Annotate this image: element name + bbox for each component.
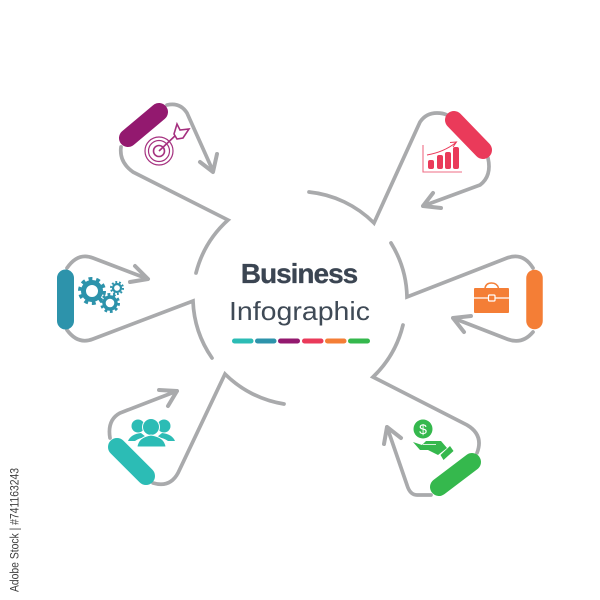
icon: hand holding dollar coin: $	[419, 421, 427, 437]
pill: blue	[57, 278, 74, 321]
connector line with arrow	[373, 325, 479, 495]
pill: orange	[526, 278, 543, 321]
title	[229, 258, 370, 326]
icon: gears	[80, 279, 123, 312]
connector line with arrow	[121, 104, 228, 273]
colour bar row	[232, 338, 370, 344]
icon: three people	[128, 418, 175, 447]
panel: chart (top right)	[309, 113, 489, 223]
connector line with arrow	[309, 113, 489, 223]
icon: target with arrow	[145, 124, 189, 165]
connector line with arrow	[109, 374, 284, 484]
heading: Infographic: Infographic	[229, 296, 370, 326]
icon: bar chart rising	[423, 142, 462, 172]
panel: money (bottom right)	[373, 325, 479, 495]
pill: red	[454, 120, 483, 150]
connector line with arrow	[391, 243, 533, 341]
pill: teal	[117, 447, 146, 476]
heading: Business: Business	[241, 258, 358, 289]
pill: purple	[128, 112, 159, 138]
pill: green	[439, 462, 472, 487]
connector line with arrow	[67, 256, 212, 358]
stock credit: Adobe Stock | #741163243	[10, 468, 22, 592]
panel: briefcase (right)	[391, 243, 534, 341]
icon: hand holding dollar coin	[413, 420, 454, 460]
panel: gears (left)	[66, 256, 212, 358]
icon: briefcase	[474, 283, 509, 313]
panel: target (top left)	[121, 104, 228, 273]
panel: team (bottom left)	[109, 374, 284, 484]
